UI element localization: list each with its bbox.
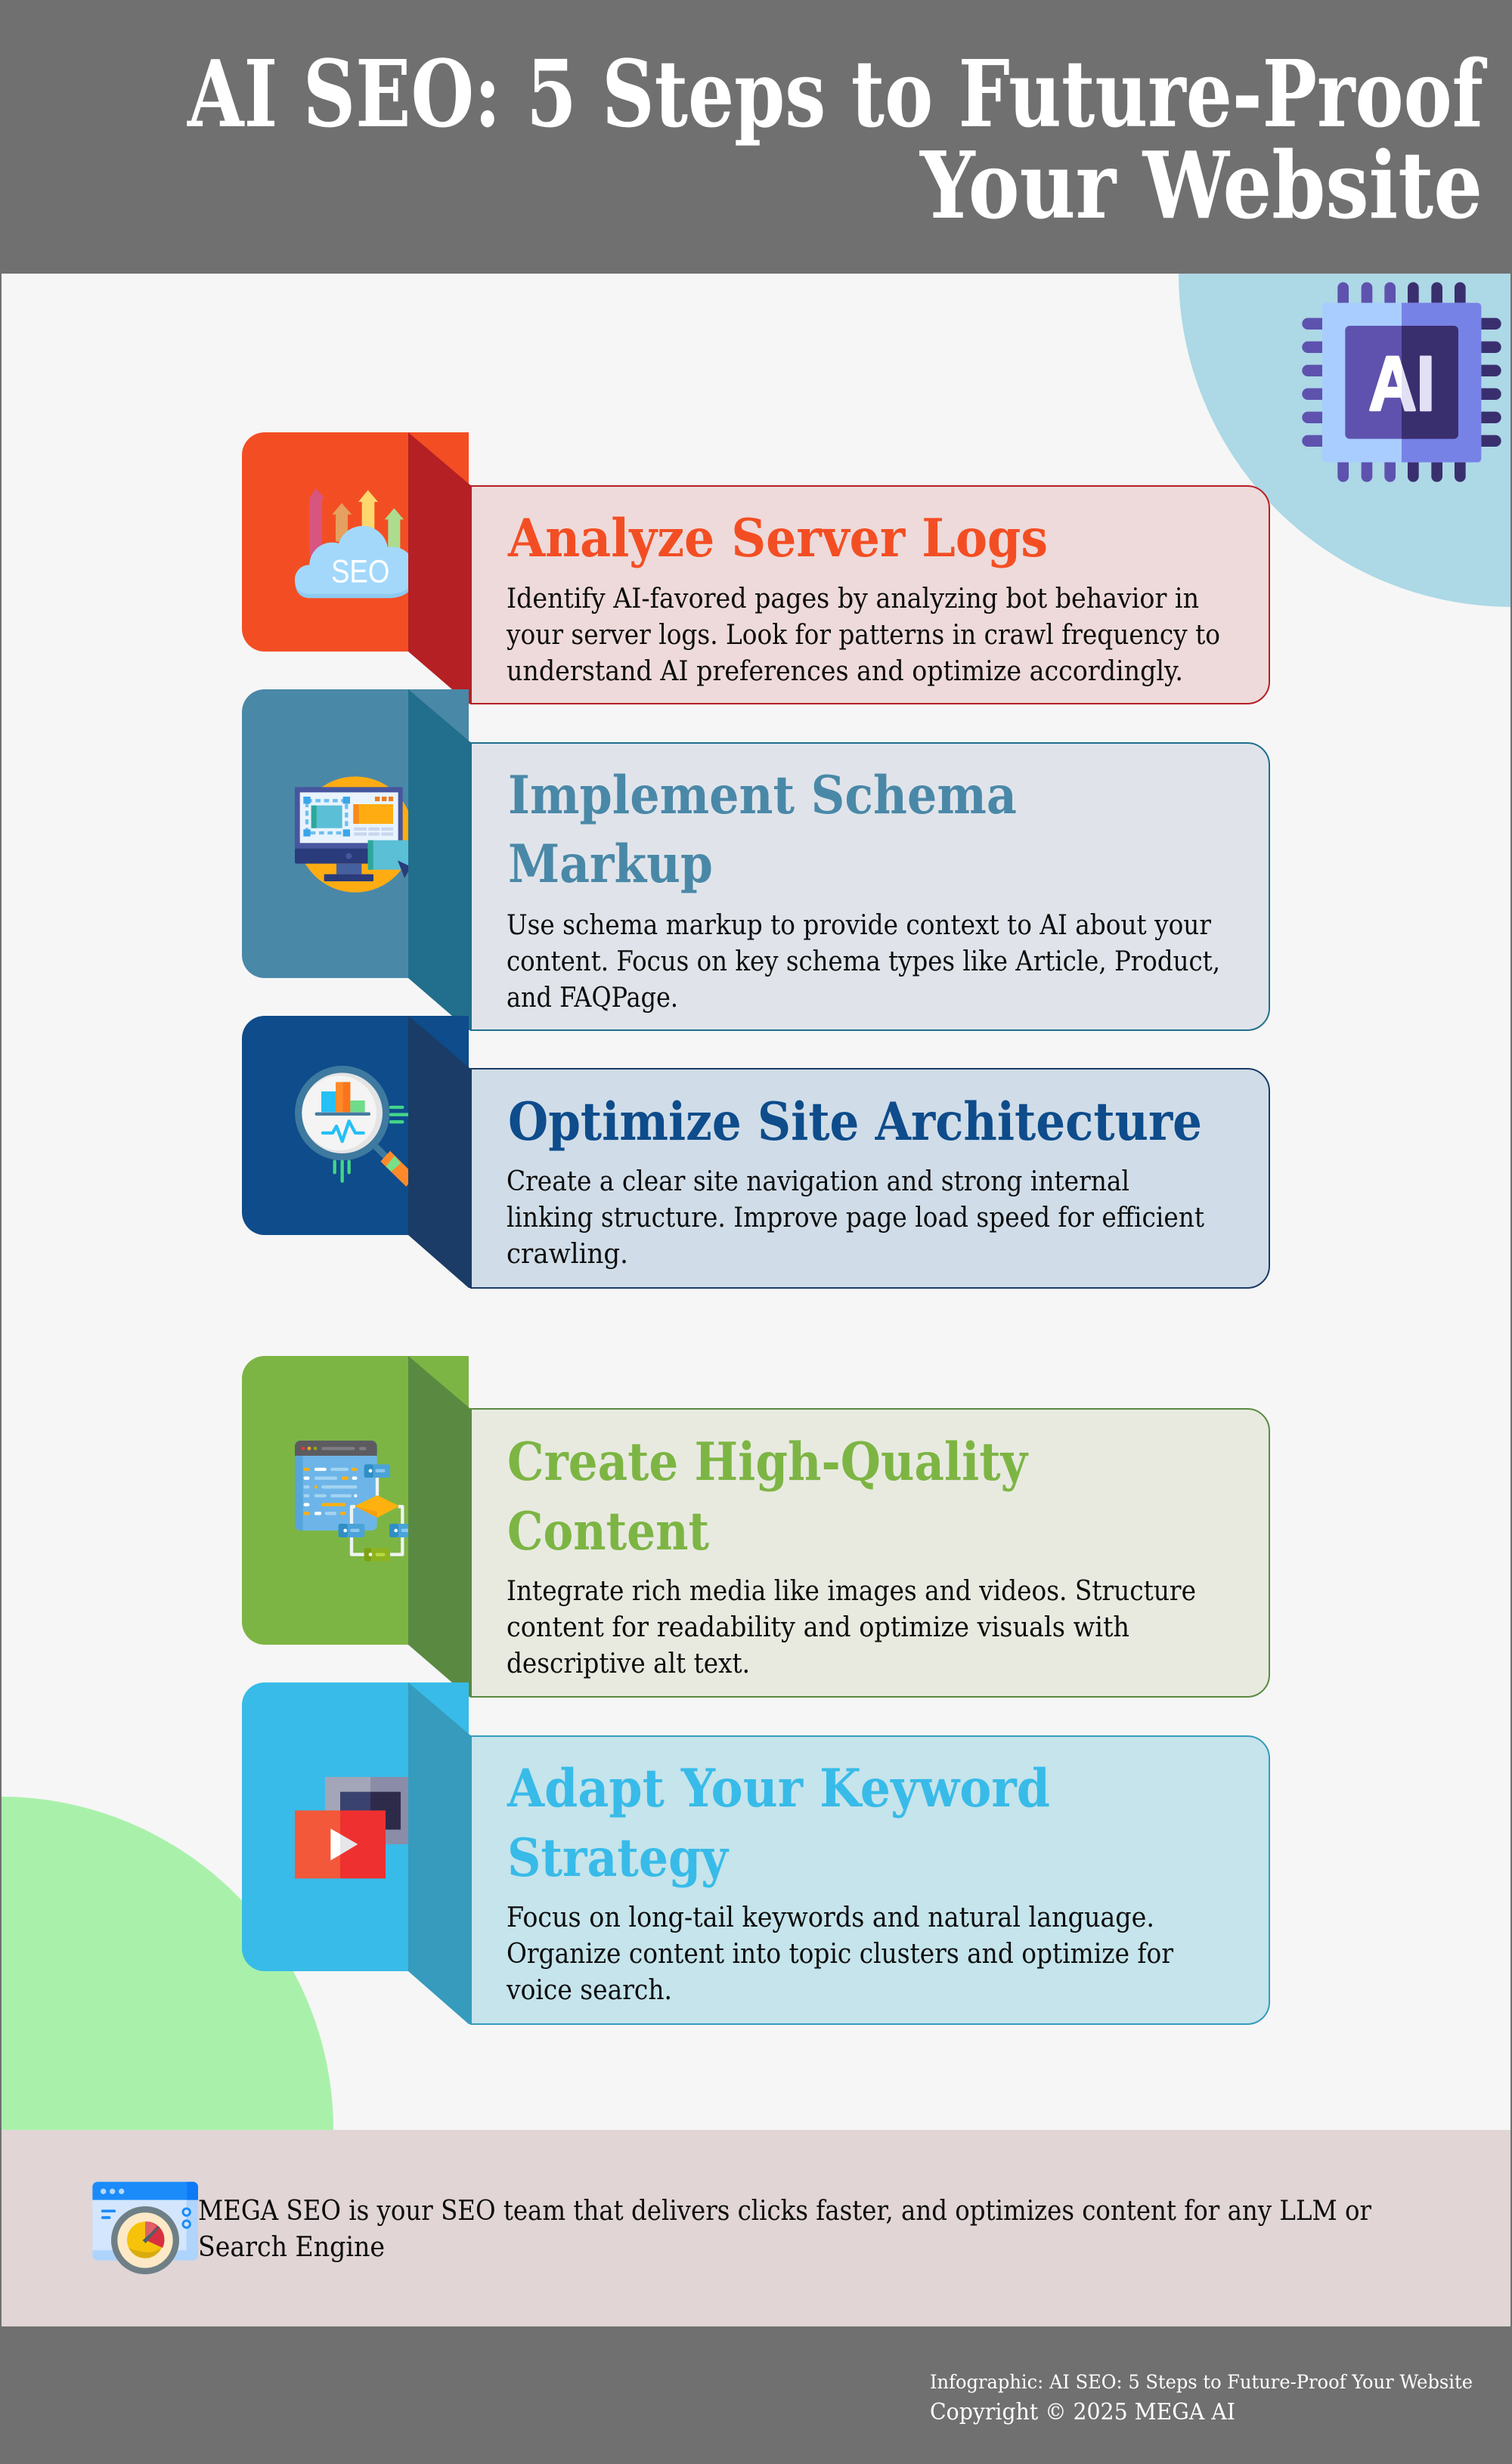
step 2 body text	[507, 910, 1220, 1014]
footer caption: Infographic: AI SEO: 5 Steps to Future-Proof Your Website	[930, 2371, 1473, 2393]
step 3 fold	[408, 1016, 472, 1288]
icon: AI chip: AI	[1368, 341, 1435, 427]
step 4 icon tile	[242, 1356, 469, 1645]
step 2 icon tile	[242, 689, 469, 978]
icon: SEO cloud with arrows: SEO	[331, 553, 389, 590]
copyright: Copyright © 2025 MEGA AI	[930, 2399, 1235, 2425]
step 5 body text: Organize content into topic clusters and optimize for	[507, 1939, 1174, 1970]
step 4 heading: Content	[507, 1501, 709, 1562]
icon: AI chip	[1302, 282, 1501, 482]
promo text: Search Engine	[198, 2232, 385, 2263]
panel: step 4 create high-quality content	[242, 1356, 1269, 1697]
header banner	[0, 0, 1512, 274]
promo text	[198, 2196, 1372, 2263]
step 3 body text: crawling.	[507, 1239, 628, 1270]
step 1 heading: Analyze Server Logs	[507, 508, 1048, 569]
panel: step 2 implement schema markup	[242, 689, 1269, 1030]
step 4 fold	[408, 1356, 472, 1697]
step 5 text panel	[471, 1736, 1269, 2024]
step 4 body text: descriptive alt text.	[507, 1648, 750, 1679]
step 5 body text: Focus on long-tail keywords and natural language.	[507, 1902, 1154, 1933]
icon: code window with flowchart	[295, 1441, 415, 1562]
step 1 text panel	[471, 486, 1269, 704]
step 4 heading	[507, 1432, 1029, 1562]
step 4 text panel	[471, 1409, 1269, 1697]
title	[187, 39, 1488, 240]
step 1 body text: understand AI preferences and optimize accordingly.	[507, 656, 1183, 687]
step 4 body text: content for readability and optimize visuals with	[507, 1612, 1129, 1643]
icon: video play windows	[295, 1777, 408, 1878]
panel: step 5 adapt your keyword strategy	[242, 1682, 1269, 2024]
step 2 body text: Use schema markup to provide context to AI about your	[507, 910, 1212, 941]
panel: MEGA SEO promo band	[2, 2130, 1510, 2326]
step 5 body text: voice search.	[506, 1975, 672, 2006]
step 1 body text	[506, 583, 1220, 687]
step 4 body text	[507, 1576, 1196, 1679]
decorative circle: bottom left green	[2, 1797, 333, 2130]
icon: SEO cloud with arrows	[295, 488, 408, 598]
panel: step 3 optimize site architecture	[242, 1016, 1269, 1288]
step 5 fold	[408, 1682, 472, 2024]
step 5 body text	[506, 1902, 1174, 2006]
step 2 heading	[508, 765, 1017, 895]
step 2 fold	[408, 689, 472, 1030]
footer	[0, 2326, 1512, 2464]
step 1 body text: Identify AI-favored pages by analyzing bot behavior in	[507, 583, 1199, 614]
step 3 icon tile	[242, 1016, 469, 1235]
step 1 icon tile	[242, 432, 469, 652]
step 5 heading: Adapt Your Keyword	[507, 1758, 1050, 1819]
step 2 heading: Markup	[508, 834, 713, 895]
icon: magnifier with chart	[295, 1066, 411, 1187]
icon: monitor with layout	[295, 776, 414, 893]
step 2 text panel	[471, 743, 1269, 1030]
panel: step 1 analyze server logs	[242, 432, 1269, 704]
icon: AI chip: AI	[1368, 341, 1435, 427]
step 4 heading: Create High-Quality	[507, 1432, 1029, 1493]
decorative circle: top right blue	[1179, 274, 1510, 607]
step 1 fold	[408, 432, 472, 704]
step 3 heading: Optimize Site Architecture	[508, 1091, 1202, 1153]
step 3 text panel	[471, 1069, 1269, 1288]
step 3 body text	[507, 1166, 1204, 1270]
promo text: MEGA SEO is your SEO team that delivers clicks faster, and optimizes content for any LLM or	[198, 2196, 1372, 2227]
step 2 body text: and FAQPage.	[507, 983, 678, 1014]
step 3 body text: linking structure. Improve page load speed for efficient	[507, 1203, 1204, 1234]
step 1 body text: your server logs. Look for patterns in crawl frequency to	[506, 620, 1220, 651]
icon: browser window with speed gauge	[92, 2182, 198, 2274]
step 4 body text: Integrate rich media like images and videos. Structure	[507, 1576, 1196, 1607]
step 5 heading: Strategy	[507, 1828, 730, 1889]
step 5 heading	[507, 1758, 1050, 1889]
step 2 body text: content. Focus on key schema types like Article, Product,	[507, 946, 1220, 977]
step 5 icon tile	[242, 1682, 469, 1971]
step 2 heading: Implement Schema	[508, 765, 1017, 826]
step 3 body text: Create a clear site navigation and strong internal	[507, 1166, 1129, 1197]
